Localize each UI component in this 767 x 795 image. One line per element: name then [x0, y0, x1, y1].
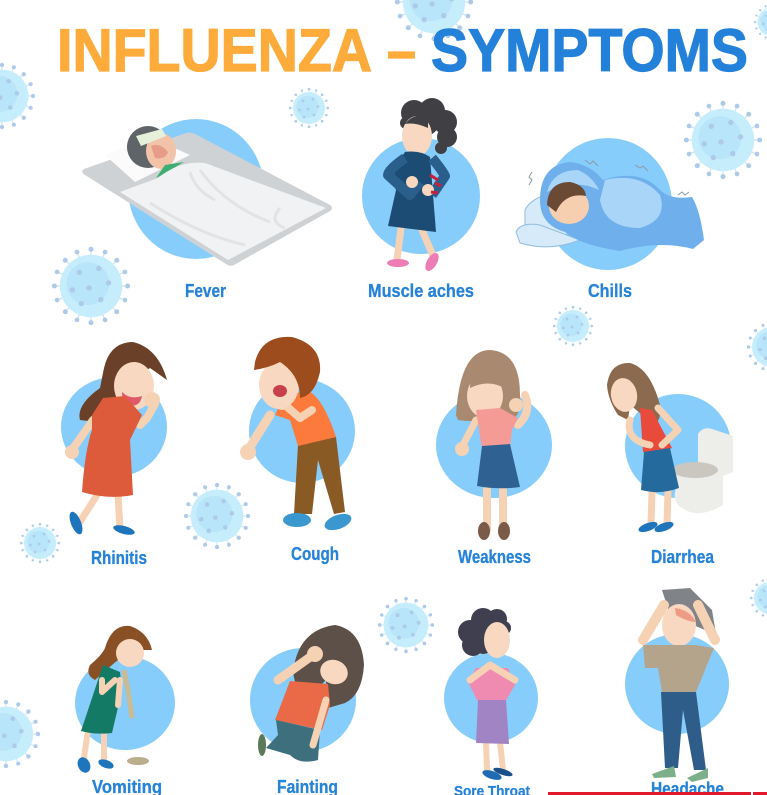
collar: [156, 162, 184, 178]
shirt: [275, 390, 336, 446]
hair: [293, 625, 364, 708]
panel: cough: [240, 337, 355, 533]
arms: [629, 408, 678, 445]
hair: [88, 626, 152, 680]
shirt: [476, 408, 518, 449]
sick head: [127, 126, 176, 169]
label: Diarrhea: Diarrhea: [651, 547, 715, 567]
shoes: [481, 768, 503, 782]
panel: headache: [625, 588, 729, 782]
label: Rhinitis: Rhinitis: [91, 548, 147, 568]
panel: fever: [82, 119, 332, 266]
shirt: [640, 408, 672, 453]
panel: vomiting: [75, 626, 175, 775]
skirt: [477, 444, 520, 488]
arm: [250, 415, 270, 447]
label: Chills: Chills: [588, 281, 632, 301]
shirt: [468, 668, 515, 702]
arms: [463, 420, 476, 445]
panel: muscle aches: [362, 98, 480, 273]
shiver marks: [529, 160, 689, 195]
title: INFLUENZA: [57, 17, 372, 84]
hair: [400, 98, 457, 154]
mattress: [82, 133, 332, 266]
label: Cough: Cough: [291, 544, 339, 564]
dress: [82, 396, 142, 497]
panel: chills: [516, 138, 704, 270]
red bar: [548, 792, 767, 795]
shoes: [478, 522, 490, 540]
pants: [294, 437, 345, 514]
shoes: [75, 755, 93, 775]
skirt: [641, 448, 679, 492]
jeans: [661, 692, 706, 770]
panel: diarrhea: [607, 363, 733, 534]
panel: rhinitis: [61, 342, 167, 537]
shoes: [283, 513, 311, 527]
legs: [651, 490, 668, 524]
pants: [266, 720, 320, 762]
shirt: [275, 681, 330, 730]
pillow: [105, 137, 190, 182]
arm: [102, 680, 120, 705]
hair: [607, 363, 660, 425]
arm up: [278, 655, 313, 680]
hair: [79, 342, 167, 421]
head: [259, 361, 299, 409]
skirt: [476, 700, 509, 744]
legs: [487, 490, 503, 530]
shoes: [652, 766, 676, 778]
legs: [78, 495, 120, 528]
arms: [643, 605, 715, 640]
legs: [397, 228, 434, 260]
panel: fainting: [250, 625, 364, 762]
arms: [72, 420, 93, 450]
hair: [458, 608, 511, 656]
blanket body: [540, 162, 704, 251]
arm and shoe: [313, 700, 326, 745]
shoes: [387, 259, 409, 267]
shoes: [67, 510, 85, 536]
label: Weakness: Weakness: [458, 547, 531, 567]
panel: weakness: [436, 350, 552, 540]
dress: [81, 665, 122, 734]
hair: [456, 350, 520, 421]
legs: [486, 742, 503, 770]
title: SYMPTOMS: [431, 17, 748, 84]
shoes: [637, 520, 659, 534]
label: Muscle aches: Muscle aches: [368, 281, 474, 301]
pillow: [525, 195, 580, 235]
vomit: [124, 670, 132, 718]
title: –: [387, 17, 416, 84]
shirt: [643, 645, 714, 692]
toilet: [672, 428, 733, 513]
blanket: [120, 163, 326, 260]
arms: [470, 665, 515, 680]
legs: [83, 730, 104, 764]
title: [57, 17, 748, 84]
panel: sore throat: [444, 608, 538, 782]
face: [547, 182, 589, 224]
dress: [388, 152, 436, 232]
hair: [662, 588, 717, 640]
label: Fever: Fever: [185, 281, 226, 301]
hands and pain marks: [406, 176, 418, 188]
